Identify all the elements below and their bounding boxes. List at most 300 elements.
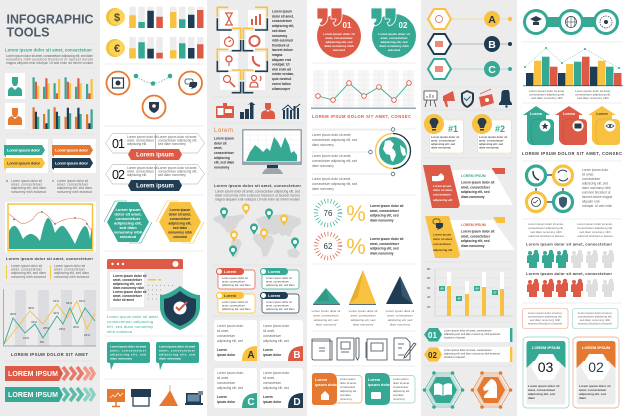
intro text: nonummy nibh euismod tincidunt ut laoreet dolore [6,58,93,62]
bullet text right: nonummy nibh euismod [57,190,92,194]
hexagon: yellow: nonummy nibh [168,230,192,234]
pyramid teal [313,288,340,305]
panel: step 02: Lorem ipsum dolor sit amet, [158,166,197,170]
card A: sit amet, [217,329,229,333]
pyramid captions: diam nonummy [390,322,411,326]
pictogram heading 2: Lorem ipsum dolor sit amet, consectetuer [526,271,612,276]
icon: euro coin: € [114,43,120,55]
bar chart with trend [523,47,623,86]
pyramid captions: Lorem ipsum dolor sit [312,309,340,313]
globe with notes [312,128,411,191]
outline note teal: consectetuer adipiscing elit, [578,314,612,318]
caption and text columns: adipiscing elit, sed diam [54,271,89,275]
line chart: 42% [53,311,59,315]
browser window: amet, consectetuer [113,294,143,298]
quote circle 02: amet, consectetuer [380,36,408,40]
pyramid captions: amet, consectetuer [350,314,376,318]
icon: laptop [185,391,203,405]
line chart: 30% [73,325,79,329]
card #2 [472,114,512,153]
label cards ABCD: adipiscing elit, sed diam [266,283,295,287]
bar chart with labels: 80 [427,267,431,271]
two column text [528,222,613,238]
two column text: sed diam nonummy nibh [579,230,611,234]
card D: D [293,397,301,408]
speech bubble 1: amet, consectetuer [110,348,147,352]
paragraph beside tiles: wisi enim ad [271,68,291,72]
two column text: Lorem ipsum dolor sit amet, [528,222,564,226]
big card 02: diam [579,396,586,400]
gauge 76 percent: % [346,201,366,226]
paragraph beside tiles: aliquam erat [272,58,292,62]
card #1: adipiscing elit, sed [431,142,455,146]
teal card: sed diam [393,393,405,397]
two column text: euismod tincidunt ut laoreet [577,234,613,238]
gauge 76 percent: Lorem ipsum dolor sit [370,204,404,208]
browser window: dolor sit amet [113,298,135,302]
label cards ABCD: adipiscing elit, sed diam [266,307,295,311]
gauge 62 percent: diam nonummy [370,252,394,256]
icon: mountain [159,385,178,406]
label cards ABCD: Lorem [268,269,281,274]
icon: euro coin [106,39,125,57]
line chart: 30% [10,312,16,316]
pyramid captions: adipiscing elit, sed [314,318,339,322]
ribbon panel red: Lorem ipsum dolor sit [461,180,495,184]
panel: ribbon labels: Lorem ipsum dolor [55,148,88,152]
card #1: amet, consectetuer [431,138,456,142]
paragraph beside tiles: minim veniam, [272,72,294,76]
bar tracks chart: top row [129,7,204,28]
ribbon panel yellow: LOREM IPSUM [461,223,486,227]
icon: dollar coin: $ [114,12,120,24]
gauge 62 percent [316,234,404,259]
chart caption text: sed diam nonummy nibh [531,96,563,100]
panel: step 02: Lorem ipsum [136,184,174,190]
browser window: amet, consectetuer [113,278,143,282]
label cards ABCD: Lorem ipsum dolor sit [222,276,248,280]
globe with notes: Lorem ipsum dolor sit amet, [312,177,351,181]
quote circle 01: diam nonummy nibh [324,44,354,48]
big card 03: adipiscing elit, sed [528,392,555,396]
section text: Lorem ipsum dolor sit amet, consectetuer [214,183,301,188]
ribbon panel yellow: Lorem ipsum dolor sit [461,230,495,234]
pyramid captions: amet, consectetuer [313,314,339,318]
section text: magna aliquam erat volutpat. Ut wisi enim ad minim veniam [215,198,300,202]
globe with notes: diam nonummy [312,143,334,147]
title: TOOLS [6,24,50,40]
caption and text columns [6,256,93,279]
arrow card red: Lorem [563,111,576,116]
globe with notes: Lorem ipsum dolor sit amet, [312,154,351,158]
icon: id card [216,103,234,118]
text block: lorem: Lorem [214,128,233,134]
pyramid captions: adipiscing elit, sed [388,318,413,322]
gauge 62 percent: 62 [324,242,333,251]
outline note teal: euismod tincidunt ut laoreet [578,322,612,326]
line chart [4,289,96,346]
monitor chart [242,129,302,174]
label cards ABCD: Lorem ipsum dolor sit [266,300,292,304]
speech bubble 2: adipiscing elit, sed [159,352,195,356]
arrow: red [5,366,94,381]
speech bubble 2: Lorem ipsum dolor sit amet [159,344,195,348]
card B: consectetuer [263,334,282,338]
panel: step 01: 01 [112,137,125,151]
teal caption: consectetuer adipiscing [107,320,153,324]
panel: step 01: Lorem ipsum dolor sit [127,135,158,139]
gauge 62 percent: % [346,234,366,259]
big card 03: LOREM IPSUM [532,345,561,350]
panel: ribbon labels: Lorem ipsum dolor [7,160,40,166]
teal caption: elit, sed diam nonummy [107,325,153,329]
orange card: adipiscing elit, [340,389,357,393]
arrow card red [555,106,587,145]
card B: sit amet, [263,329,275,333]
globe with notes: diam nonummy [312,164,334,168]
globe with notes: consectetuer adipiscing elit, sed [312,159,357,163]
chart caption text: sed diam nonummy nibh [577,96,609,100]
line chart: 63% [79,299,85,303]
banner 02 [424,347,513,362]
pyramid captions: amet, consectetuer [387,314,413,318]
card C: sit amet, [217,376,229,380]
orange card: consectetuer [340,385,355,389]
card D: Lorem [263,395,273,399]
paragraph beside tiles [271,10,294,91]
icon: money [479,89,494,107]
text block: lorem: adipiscing [214,156,230,160]
card A: Lorem [217,348,227,352]
icon: presentation board [424,91,437,107]
big card 03: Lorem ipsum dolor sit [528,384,560,388]
teal card: adipiscing elit, [393,389,410,393]
line chart: 34% [31,320,37,324]
card C: ipsum dolor [217,400,236,404]
teal card: dolor sit amet, [393,381,410,385]
orange card: nonummy [340,398,352,401]
hexagon: book [423,371,464,409]
row B: B [488,39,496,51]
row C: C [488,64,496,76]
browser window [107,259,183,311]
paragraph by rings: aliquam erat [582,200,600,204]
paragraph by rings: diam nonummy nibh [582,186,611,190]
pyramid captions [312,309,414,326]
gauge 62 percent: Lorem ipsum dolor sit [370,237,404,241]
bullet text left [6,179,46,194]
icon: shield check [461,90,474,108]
globe with notes: diam nonummy [312,187,334,191]
big card 02: 02 [588,359,604,375]
quote circle 01: euismod [333,48,345,52]
teal card: Lorem [368,377,381,382]
panel: step 01: Lorem ipsum dolor sit amet, [158,135,197,139]
panel: step 01: amet, consectetuer [127,138,155,142]
intro text: magna aliquam erat volutpat. Ut wisi enim ad minim veniam [6,61,93,65]
label cards ABCD: adipiscing elit, sed diam [222,283,251,287]
two column text: consectetuer adipiscing elit, [577,226,613,230]
label cards ABCD: Lorem [224,293,237,298]
caption and text columns: Lorem ipsum dolor sit amet, consectetuer [6,256,93,261]
outline note orange: euismod tincidunt ut laoreet [528,322,562,326]
hexagon: yellow: Lorem ipsum [170,208,190,212]
arrow: teal [5,387,94,402]
panel: step 02 [106,164,204,191]
chart caption text: consectetuer adipiscing elit, [575,92,611,96]
speech bubble 2 [156,342,199,370]
world map with pins [213,203,301,258]
icon: paper and pen [394,338,416,360]
pyramid captions: diam nonummy [316,322,337,326]
card A: consectetuer [217,334,236,338]
speech bubble 1: diam nonummy [110,356,132,360]
paragraph beside tiles: laoreet dolore [272,48,293,52]
browser window: adipiscing elit, sed [113,282,142,286]
pyramid captions: adipiscing elit, sed [351,318,376,322]
label cards ABCD: amet, consectetuer [266,304,289,308]
big card 03 [523,337,569,408]
big card 03: diam [528,396,535,400]
card D: Lorem ipsum dolor [263,371,290,375]
panel: step 01: Lorem ipsum [136,152,174,158]
two column text: consectetuer adipiscing elit, [528,226,564,230]
card #1 [424,114,464,153]
speech bubble 2: amet, consectetuer [159,348,196,352]
bar chart with labels: 40 [427,295,431,299]
bar chart with labels [427,267,513,316]
text block: lorem: Lorem ipsum [214,136,234,140]
pyramid dark [386,276,413,304]
pyramid captions: Lorem ipsum dolor sit [386,309,414,313]
arrow card yellow: Lorem [596,112,608,116]
two column text: euismod tincidunt ut laoreet [528,234,564,238]
ribbon panel yellow: dolor sit amet, [433,237,453,241]
quote circle 01 [317,8,361,58]
icon: orange person [5,103,25,129]
panel: step 02: sed diam nonummy [158,173,186,177]
hexagon: yellow: dolor sit amet, [169,212,191,216]
card D [260,368,303,408]
card B: Lorem [263,348,273,352]
icon: monitor [107,389,125,406]
ribbon panel yellow: Lorem ipsum [433,232,452,236]
teal card: Lorem ipsum [393,377,409,381]
panel: step 01: adipiscing elit, [127,142,147,146]
icon: teal person [5,73,25,99]
intro text: Lorem ipsum dolor sit amet, consectetuer [5,48,92,52]
card #1: #1 [448,124,458,134]
card #2: Lorem ipsum dolor sit [479,135,507,139]
bar chart with labels: 57 [493,290,497,294]
card #2: #2 [495,124,505,134]
bullet text right: amet, consectetuer [57,182,89,186]
ribbon panel red [423,165,513,208]
pyramid yellow [349,270,376,305]
paragraph beside tiles: Lorem ipsum [272,10,292,14]
text block: lorem: dolor sit [214,142,228,146]
line chart: 29% [59,327,65,331]
orange card: sed diam [340,393,352,397]
card D: adipiscing elit, sed [263,386,289,390]
outline note orange: sed diam nonummy nibh [530,318,561,322]
line chart: 28% [43,326,49,330]
bar chart with labels: 20 [427,305,431,309]
outline note orange [522,308,568,328]
paragraph beside tiles: consectetuer [272,19,293,23]
line chart: 10% [23,336,29,340]
gauge 62 percent: adipiscing elit, sed [370,246,399,250]
card B: Lorem ipsum dolor [263,324,290,328]
quote circle 02: 02 [399,21,408,30]
gauge 76 percent: adipiscing elit, sed [370,214,399,218]
line chart: 54% [66,301,72,305]
panel: step 02: consectetuer adipiscing elit, [158,170,197,174]
pictogram row teal [527,250,614,268]
dotted connector [134,74,172,86]
banner 01: adipiscing elit, sed diam nonummy nibh euismod [444,332,500,336]
card B: ipsum dolor [263,353,282,357]
gauge 62 percent: amet, consectetuer [370,242,400,246]
hexagon: teal: euismod [120,234,137,239]
teal card: nonummy [393,398,405,401]
section text [214,183,301,202]
red heading: LOREM IPSUM DOLOR SIT AMET, CONSEC [312,114,411,119]
teal caption: nibh euismod [107,330,132,334]
paragraph beside tiles: adipiscing elit, [272,24,294,28]
big card 02: adipiscing elit, sed [579,392,606,396]
card C: C [247,397,255,408]
paragraph beside tiles: quis nostrud [272,77,291,81]
icon: megaphone [443,91,455,107]
banner 02: adipiscing elit, sed diam nonummy nibh euismod [444,352,500,356]
gauge 76 percent: amet, consectetuer [370,209,400,213]
icon ring: speech [179,72,202,94]
panel: step 02: Lorem ipsum dolor sit [127,166,158,170]
quote circle 02: euismod [388,48,400,52]
bullet text right [52,179,92,194]
paragraph beside tiles: sed diam [272,29,286,33]
card A: ipsum dolor [217,353,236,357]
hexagon: yellow [156,201,204,243]
outline note teal [572,308,618,328]
pictogram row red [527,279,614,297]
caption and text columns: amet, consectetuer [11,268,43,272]
paragraph beside tiles: nibh euismod [272,38,293,42]
line chart: 49% [28,306,34,310]
text block: lorem: consectetuer [214,151,235,155]
icon ring: shield [142,96,166,118]
gauge 76 percent: diam nonummy [370,218,394,222]
orange card [312,373,362,405]
ribbon panel red: adipiscing elit, sed [461,190,490,194]
gauge 76 percent: 76 [324,209,333,218]
card C: adipiscing elit, sed [217,386,243,390]
quote circle 01: adipiscing elit, sed [326,40,353,44]
outline note orange: Lorem ipsum dolor sit amet, [528,311,562,315]
browser window: Lorem ipsum dolor sit [113,290,147,294]
card #2: adipiscing elit, sed [479,142,503,146]
hexagon: chess knight [471,371,512,409]
banner 02: Lorem ipsum dolor sit amet, consectetuer [444,348,492,352]
ribbon panel red: LOREM IPSUM [461,174,486,178]
bar chart with labels: 60 [440,286,444,290]
panel: icon tiles grid [217,7,267,93]
label cards ABCD: adipiscing elit, sed diam [222,307,251,311]
intro text [5,48,93,65]
area chart [5,202,96,252]
big card 02: Lorem ipsum dolor sit [579,384,611,388]
chart caption text: Lorem ipsum dolor sit amet, [529,89,565,93]
quote circle 02: Lorem ipsum dolor sit [378,32,410,36]
text block: lorem [214,128,235,170]
hexagon: teal: nonummy nibh [114,230,143,234]
chart caption text: Lorem ipsum dolor sit amet, [575,89,611,93]
teal card [365,373,415,405]
quote circle 01: amet, consectetuer [325,36,353,40]
card D: ipsum dolor [263,400,282,404]
ribbon panel red: dolor sit amet, [433,188,453,192]
quote circle 02: adipiscing elit, sed [381,40,408,44]
icon: spiral pad [366,339,387,360]
icon: shop [131,389,151,406]
speech bubble 1 [107,342,150,370]
teal card: ipsum dolor [368,382,391,387]
ribbon panel red: consectetuer [433,192,452,196]
pictogram heading 1: Lorem ipsum dolor sit amet, consectetuer [526,242,612,246]
caption and text columns: adipiscing elit, sed diam [11,271,46,275]
bar chart with labels: 45 [457,296,461,300]
banner 02: tincidunt ut laoreet [444,355,465,359]
caption and text columns: Lorem ipsum dolor sit [11,264,42,268]
icon: notebook [337,338,359,360]
card A: adipiscing elit, sed [217,339,243,343]
bar chart with labels: 60 [427,276,431,280]
intro text: Lorem ipsum dolor sit amet, consectetuer adipiscing elit, sed diam [6,54,93,58]
card C: consectetuer [217,381,236,385]
caption and text columns: Lorem ipsum dolor sit [54,264,85,268]
chart caption text [529,89,611,100]
banner 01: 01 [428,331,437,340]
chart caption: LOREM IPSUM DOLOR SIT AMET [11,352,88,357]
arrow card teal: Lorem [530,111,543,116]
banner 01: tincidunt ut laoreet [444,336,465,340]
card C [214,368,257,408]
ribbon panel red: amet, consectetuer [461,186,491,190]
paragraph beside tiles: dolor sit amet, [272,14,294,18]
hexagon: teal: adipiscing elit, [114,220,142,226]
bar tracks chart: second row [129,37,204,58]
bullet text left: nonummy nibh euismod [11,190,46,194]
browser window: diam nonummy nibh [113,286,144,290]
panel: step 02: 02 [112,168,125,182]
label cards ABCD [216,268,299,313]
card D: sit amet, [263,376,275,380]
ribbon panel yellow: adipiscing elit [433,248,452,252]
row B [428,34,512,54]
panel: step 02: adipiscing elit, [127,173,147,177]
paragraph beside tiles: nonummy [272,34,287,38]
panel: step 01: sed diam nonummy [158,142,186,146]
row A: A [488,14,496,26]
big card 02: LOREM IPSUM [582,345,611,350]
chart caption text: consectetuer adipiscing elit, [529,92,565,96]
outline note teal: Lorem ipsum dolor sit amet, [578,311,612,315]
arrow card teal [523,106,554,145]
ribbon panel yellow: diam nonummy [461,244,485,248]
bullet text left: amet, consectetuer [11,182,43,186]
hexagon: yellow: sed diam [173,226,187,230]
